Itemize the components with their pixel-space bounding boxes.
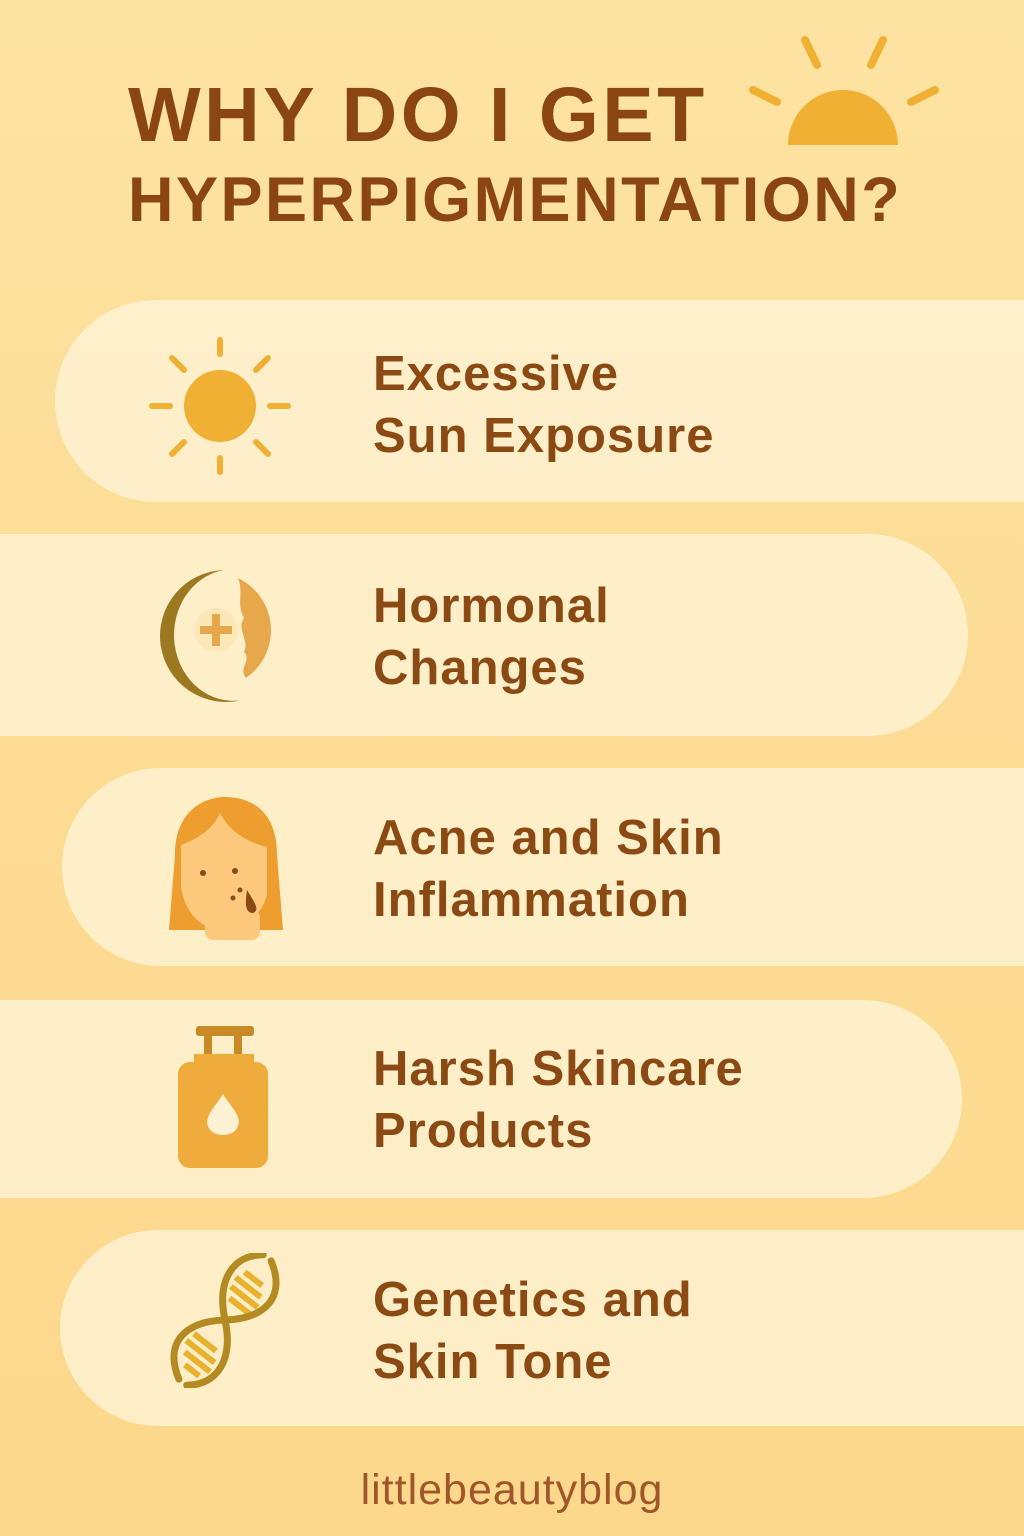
- text: acne: Acne and Skin: [373, 811, 724, 865]
- panel: genetics: [60, 1230, 1024, 1426]
- text: products: Harsh Skincare: [373, 1042, 744, 1096]
- text: hormonal: Hormonal: [373, 579, 610, 633]
- text: sun exposure: [373, 347, 714, 463]
- title: [128, 72, 902, 235]
- icon: bottle: [178, 1026, 268, 1168]
- text: genetics: Skin Tone: [373, 1335, 613, 1389]
- text: hormonal: Changes: [373, 641, 587, 695]
- icon: dna: [170, 1253, 280, 1388]
- icon: face with acne: [169, 797, 283, 940]
- title: HYPERPIGMENTATION?: [128, 165, 902, 235]
- icon: sun: [149, 337, 291, 475]
- panel: acne: [62, 768, 1024, 966]
- title: WHY DO I GET: [128, 72, 708, 158]
- icon: rising sun: [749, 36, 939, 145]
- text: hormonal: [373, 579, 610, 695]
- text: genetics: Genetics and: [373, 1273, 693, 1327]
- footer: littlebeautyblog: [361, 1466, 663, 1514]
- panel: hormonal: [0, 534, 968, 736]
- icon: hormonal moon: [160, 570, 271, 702]
- panel: products: [0, 1000, 962, 1198]
- text: products: Products: [373, 1104, 593, 1158]
- text: sun exposure: Excessive: [373, 347, 619, 401]
- panel: sun exposure: [55, 300, 1024, 502]
- text: acne: [373, 811, 724, 927]
- text: acne: Inflammation: [373, 873, 690, 927]
- text: products: [373, 1042, 744, 1158]
- text: genetics: [373, 1273, 693, 1389]
- text: sun exposure: Sun Exposure: [373, 409, 714, 463]
